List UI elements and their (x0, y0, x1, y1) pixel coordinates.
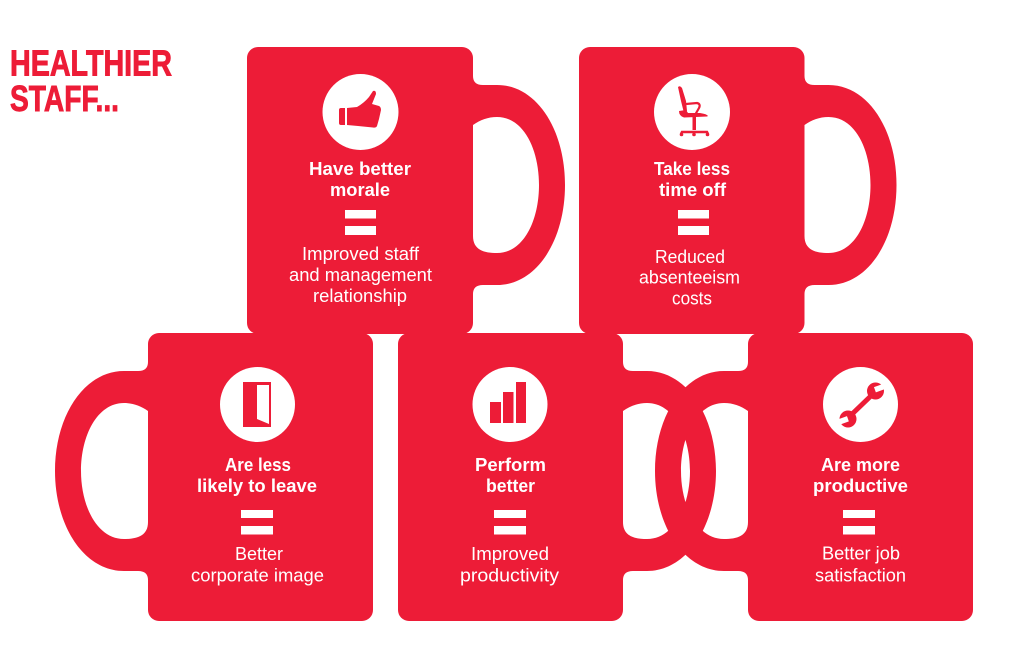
icon: wrench (823, 367, 898, 442)
equals sign (345, 210, 376, 235)
mug: have better morale (247, 47, 565, 334)
heading: Take less (654, 159, 730, 179)
heading (197, 455, 317, 496)
result text: satisfaction (815, 566, 906, 586)
mug body (398, 333, 623, 621)
icon: bar chart (472, 367, 548, 442)
result text: costs (672, 288, 712, 308)
mug handle (55, 356, 151, 586)
mug body (579, 47, 804, 334)
result text: Better job (822, 544, 900, 564)
heading: better (486, 476, 535, 496)
mug: are less likely to leave (55, 333, 373, 621)
result text: corporate image (191, 566, 324, 586)
heading: Perform (475, 455, 546, 475)
icon: office chair (654, 74, 730, 150)
mug handle (655, 356, 751, 586)
mug: take less time off (579, 47, 896, 334)
icon: thumbs up (322, 74, 398, 150)
result text: Improved (471, 544, 549, 564)
heading (309, 159, 411, 200)
heading: time off (659, 180, 727, 200)
mug handle (620, 356, 716, 586)
heading: Have better (309, 159, 411, 179)
icon: open door (220, 367, 295, 442)
equals sign (843, 510, 875, 534)
heading: productive (813, 476, 908, 496)
mug body (148, 333, 373, 621)
result text: Improved staff (302, 244, 420, 264)
title (10, 42, 172, 119)
result text: productivity (460, 566, 559, 586)
equals sign (241, 510, 273, 534)
mug: perform better (398, 333, 716, 621)
heading: Are more (821, 455, 900, 475)
result text (289, 244, 432, 306)
result text: and management (289, 265, 432, 285)
heading (813, 455, 908, 496)
heading (654, 159, 730, 200)
mug handle (802, 70, 896, 300)
result text (460, 544, 559, 586)
heading: likely to leave (197, 476, 317, 496)
result text: absenteeism (639, 268, 740, 288)
mug: are more productive (655, 333, 973, 621)
result text (815, 544, 906, 586)
result text: Reduced (655, 247, 725, 267)
result text: Better (235, 544, 283, 564)
equals sign (678, 210, 709, 235)
heading: morale (330, 180, 390, 200)
result text (191, 544, 324, 586)
title: STAFF... (10, 78, 119, 119)
title: HEALTHIER (10, 42, 172, 84)
equals sign (494, 510, 526, 534)
mug body (247, 47, 473, 334)
result text (639, 247, 740, 308)
heading: Are less (225, 455, 291, 475)
heading (475, 455, 546, 496)
mug handle (470, 70, 565, 300)
mug body (748, 333, 973, 621)
result text: relationship (313, 286, 407, 306)
